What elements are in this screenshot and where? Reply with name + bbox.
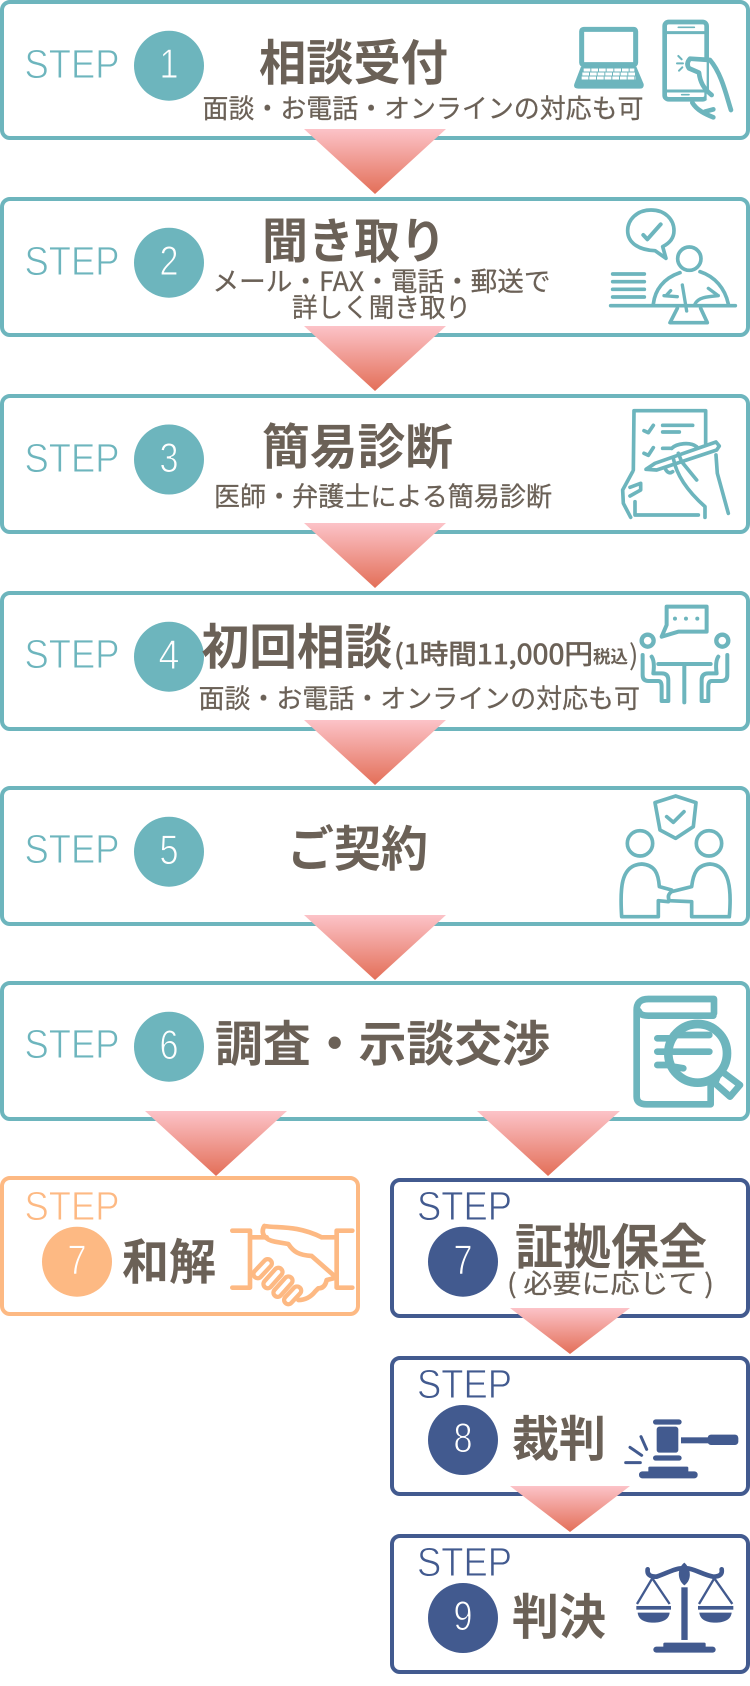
arrow: step 3 to 4	[304, 523, 446, 588]
panel: step 1	[2, 2, 748, 138]
closing parenthesis: )	[629, 634, 638, 674]
heading: 証拠保全	[515, 1208, 707, 1278]
heading: 簡易診断	[262, 408, 453, 478]
number badge	[134, 424, 204, 494]
step label: STEP	[417, 1361, 512, 1407]
tax note: 税込	[593, 644, 628, 669]
icon: handshake	[232, 1226, 352, 1300]
number badge: 2	[160, 237, 178, 284]
number badge	[134, 228, 204, 298]
description: ( 必要に応じて )	[507, 1262, 714, 1301]
arrow: step 6 to evidence preservation	[477, 1111, 620, 1176]
number badge: 4	[158, 631, 180, 678]
number badge	[134, 31, 204, 101]
number badge: 6	[160, 1021, 178, 1068]
heading: 聞き取り	[262, 202, 446, 272]
step label: STEP	[24, 631, 120, 677]
heading: 裁判	[512, 1400, 606, 1470]
panel: step 7 evidence preservation	[392, 1180, 748, 1316]
step label: STEP	[24, 1021, 120, 1067]
number badge	[428, 1583, 498, 1653]
heading: 初回相談	[202, 608, 392, 678]
icon: person at desk	[611, 210, 735, 323]
number badge	[134, 622, 204, 692]
icon: document with magnifier	[637, 999, 740, 1104]
icon: gavel	[626, 1419, 738, 1478]
number badge	[428, 1227, 498, 1297]
heading: ご契約	[287, 810, 428, 880]
number badge: 5	[160, 826, 178, 873]
arrow: step 7 to 8	[510, 1308, 630, 1354]
step label: STEP	[417, 1539, 512, 1585]
number badge	[428, 1405, 498, 1475]
description line 2: 詳しく聞き取り	[292, 286, 471, 325]
icon: handshake with shield	[621, 796, 730, 917]
arrow: step 6 to settlement	[145, 1111, 287, 1176]
icon: hand writing on checklist	[623, 411, 728, 517]
description: 面談・お電話・オンラインの対応も可	[202, 87, 644, 126]
number badge	[134, 1012, 204, 1082]
panel: step 8	[392, 1358, 748, 1494]
step label: STEP	[24, 826, 120, 872]
step label: STEP	[24, 1183, 120, 1229]
panel: step 2	[2, 199, 748, 335]
number badge: 3	[160, 434, 178, 481]
heading: 調査・示談交渉	[215, 1005, 550, 1075]
step label: STEP	[24, 435, 120, 481]
heading: 相談受付	[259, 24, 448, 94]
number badge: 8	[454, 1414, 472, 1461]
step label: STEP	[417, 1183, 512, 1229]
step label: STEP	[24, 238, 120, 284]
panel: step 7 settlement	[2, 1178, 358, 1314]
description: 面談・お電話・オンラインの対応も可	[198, 677, 640, 716]
panel: step 9	[392, 1536, 748, 1672]
number badge: 7	[454, 1236, 472, 1283]
number badge: 9	[454, 1592, 472, 1639]
number badge	[42, 1227, 112, 1297]
arrow: step 5 to 6	[304, 915, 446, 980]
icon: two people at a table	[642, 607, 728, 702]
number badge: 1	[160, 40, 178, 87]
heading: 判決	[512, 1578, 606, 1648]
arrow: step 2 to 3	[304, 326, 446, 391]
number badge: 7	[68, 1236, 86, 1283]
arrow: step 4 to 5	[304, 720, 446, 785]
panel: step 4	[2, 593, 748, 729]
panel: step 5	[2, 788, 748, 924]
panel: step 3	[2, 396, 748, 532]
icon: scales of justice	[636, 1563, 733, 1653]
description: 医師・弁護士による簡易診断	[214, 475, 552, 514]
arrow: step 8 to 9	[510, 1486, 630, 1532]
panel: step 6	[2, 983, 748, 1119]
icon: laptop and smartphone	[574, 22, 731, 117]
arrow: step 1 to 2	[304, 129, 446, 194]
price note: (1時間11,000円	[394, 633, 593, 672]
heading: 和解	[122, 1223, 216, 1293]
step label: STEP	[24, 41, 120, 87]
number badge	[134, 817, 204, 887]
description: メール・FAX・電話・郵送で	[212, 260, 550, 299]
